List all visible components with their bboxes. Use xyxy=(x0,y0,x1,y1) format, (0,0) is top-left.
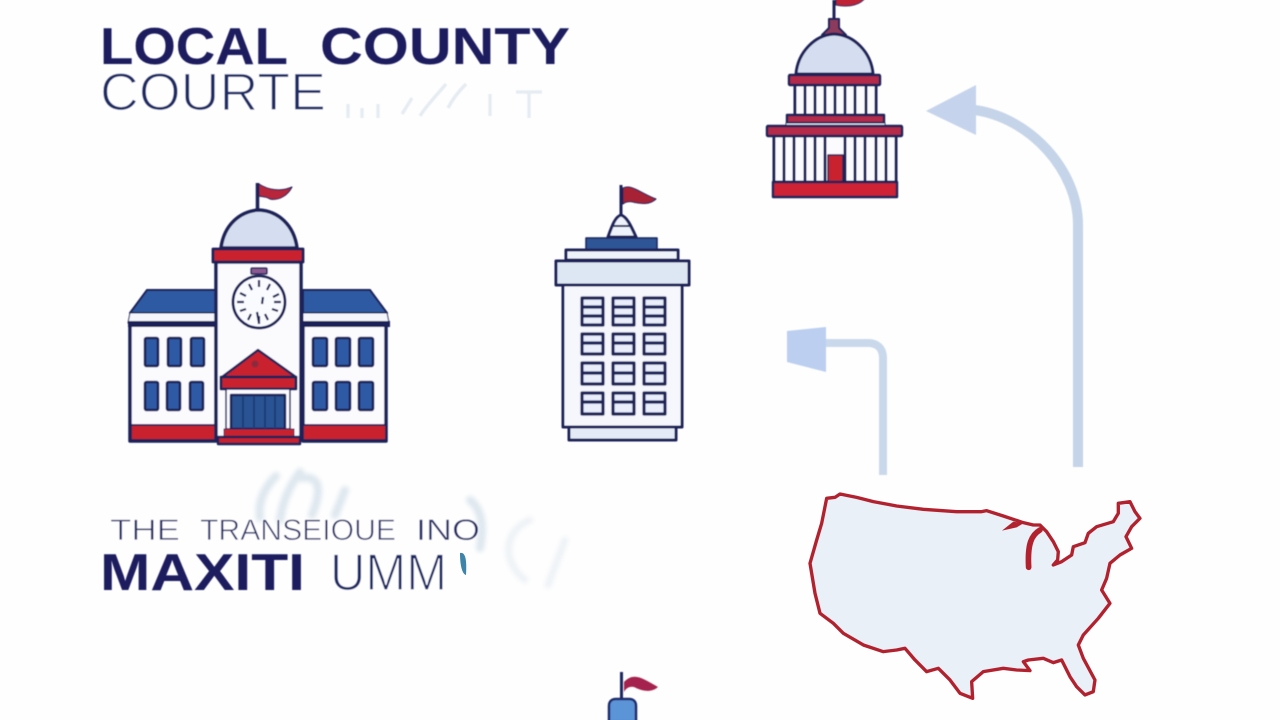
tower windows xyxy=(582,298,665,414)
lower heading: the transeioue ino maxiti umm: THE xyxy=(110,514,180,547)
courthouse portico xyxy=(218,350,300,444)
arrow: short arrow from map to tower xyxy=(787,327,883,475)
capitol door xyxy=(828,155,843,182)
arrow: tall arrow from map to capitol xyxy=(926,85,1078,467)
tower flag xyxy=(621,185,656,215)
capitol dome xyxy=(796,34,873,74)
teal tick mark xyxy=(460,553,466,575)
lower heading: the transeioue ino maxiti umm xyxy=(100,514,480,602)
map: united states outline xyxy=(810,494,1140,698)
tower cupola xyxy=(608,215,636,237)
faded brush marks behind lower heading xyxy=(260,472,565,585)
title: local county courte: LOCAL xyxy=(100,18,288,76)
courthouse red band xyxy=(213,249,303,262)
courthouse dome xyxy=(221,210,297,248)
clock xyxy=(233,268,285,328)
icon: capitol building xyxy=(767,0,902,197)
icon: courthouse with clock tower xyxy=(128,183,390,444)
title: local county courte: COURTE xyxy=(100,63,326,122)
courthouse right wing xyxy=(301,290,390,441)
lower heading: the transeioue ino maxiti umm: UMM xyxy=(330,544,447,602)
capitol lower colonnade xyxy=(767,126,902,182)
lower heading: the transeioue ino maxiti umm: MAXITI xyxy=(100,544,305,602)
tower base xyxy=(569,427,676,440)
faded ghost lettering beside title xyxy=(348,84,542,118)
capitol flag xyxy=(834,0,865,18)
capitol finial xyxy=(822,19,846,35)
tower body xyxy=(563,285,682,427)
courthouse tower xyxy=(216,262,301,440)
icon: office tower with flag xyxy=(556,185,689,440)
courthouse left wing xyxy=(128,290,218,441)
capitol upper colonnade xyxy=(786,75,885,126)
tower roof steps xyxy=(556,238,689,285)
courthouse flag xyxy=(258,183,292,211)
title: local county courte: COUNTY xyxy=(320,18,570,76)
title: local county courte xyxy=(100,18,570,122)
capitol base xyxy=(773,182,897,197)
icon: cropped flagged building at bottom xyxy=(609,672,658,720)
lower heading: the transeioue ino maxiti umm: INO xyxy=(416,514,480,547)
lower heading: the transeioue ino maxiti umm: TRANSEIOUE xyxy=(200,514,396,547)
